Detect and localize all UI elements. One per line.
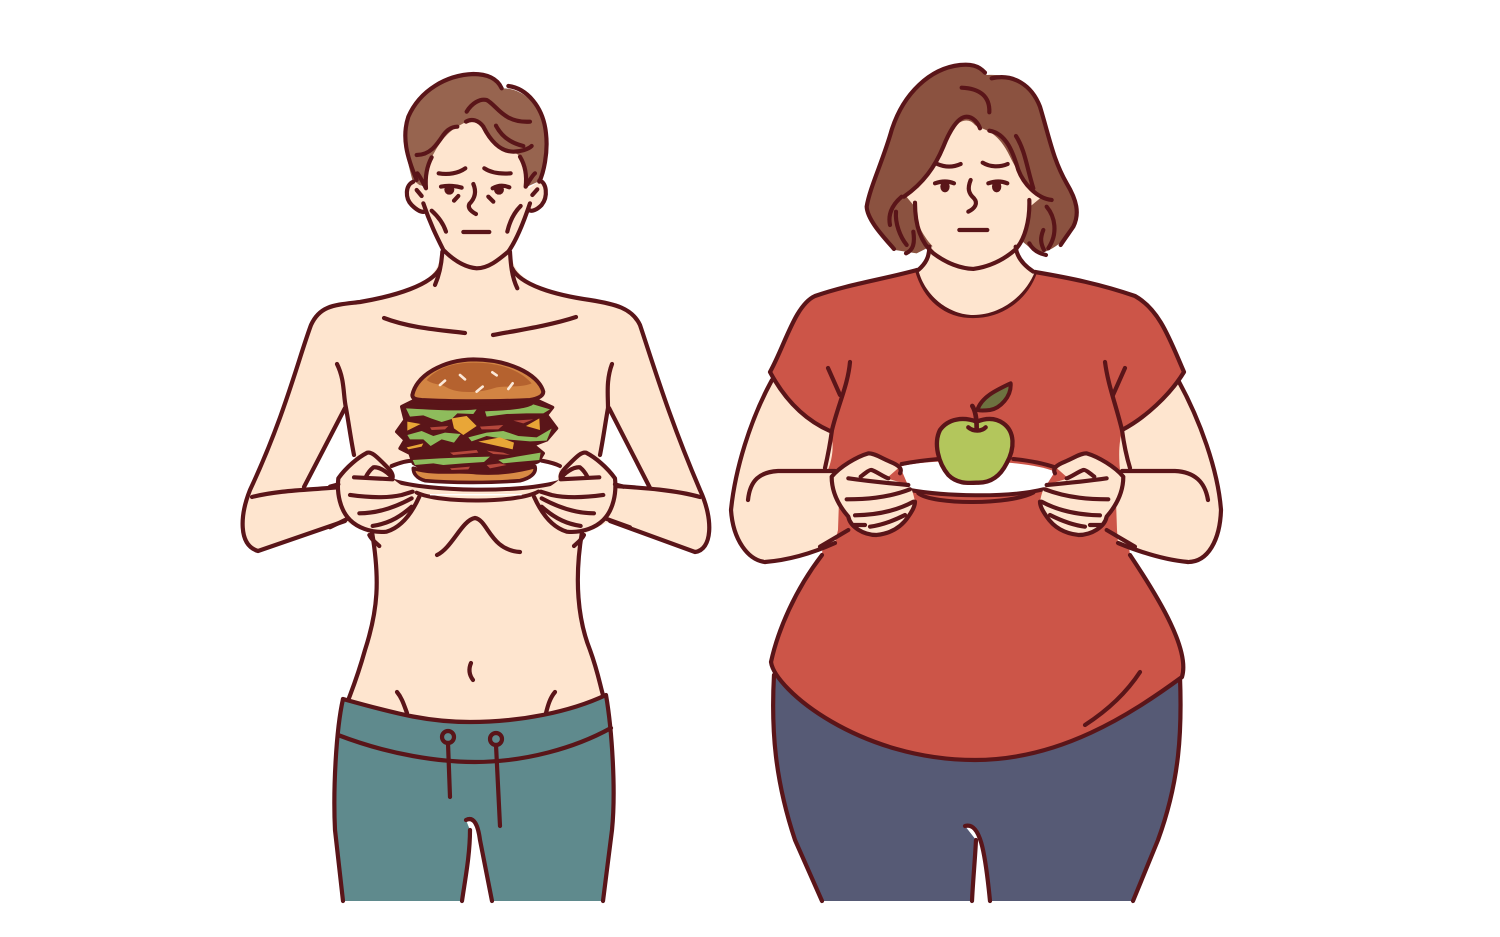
lettuce bbox=[406, 404, 550, 422]
figure: thin man bbox=[243, 74, 709, 901]
hair bbox=[867, 65, 1077, 253]
figure: woman bbox=[731, 65, 1221, 901]
plate bbox=[392, 457, 560, 501]
burger on plate with hands bbox=[330, 359, 630, 546]
right hand bbox=[534, 452, 630, 546]
man trousers bbox=[334, 695, 614, 901]
eyes bbox=[444, 185, 454, 195]
man body bbox=[243, 255, 709, 725]
hair back bbox=[405, 74, 547, 188]
woman head bbox=[867, 65, 1077, 315]
left hand bbox=[330, 452, 419, 546]
woman shirt bbox=[770, 270, 1184, 760]
cheese bbox=[452, 416, 477, 435]
woman upper arms bbox=[731, 378, 1221, 562]
left hand bbox=[820, 453, 915, 547]
face bbox=[905, 121, 1040, 268]
burger bbox=[397, 359, 557, 482]
apple on plate with hands bbox=[820, 383, 1135, 547]
bacon bbox=[430, 419, 533, 470]
woman trousers bbox=[773, 675, 1181, 901]
face bbox=[423, 120, 530, 268]
apple bbox=[937, 383, 1013, 483]
eyes bbox=[940, 181, 950, 192]
ears bbox=[408, 182, 430, 212]
filling bbox=[397, 400, 557, 473]
woman forearms bbox=[748, 471, 1208, 562]
neck bbox=[918, 247, 1035, 315]
top bun bbox=[412, 359, 543, 401]
man head bbox=[405, 74, 547, 288]
man chest and abdomen lines bbox=[384, 317, 576, 713]
plate bbox=[900, 459, 1055, 502]
bottom bun bbox=[413, 467, 535, 482]
right hand bbox=[1040, 453, 1135, 547]
